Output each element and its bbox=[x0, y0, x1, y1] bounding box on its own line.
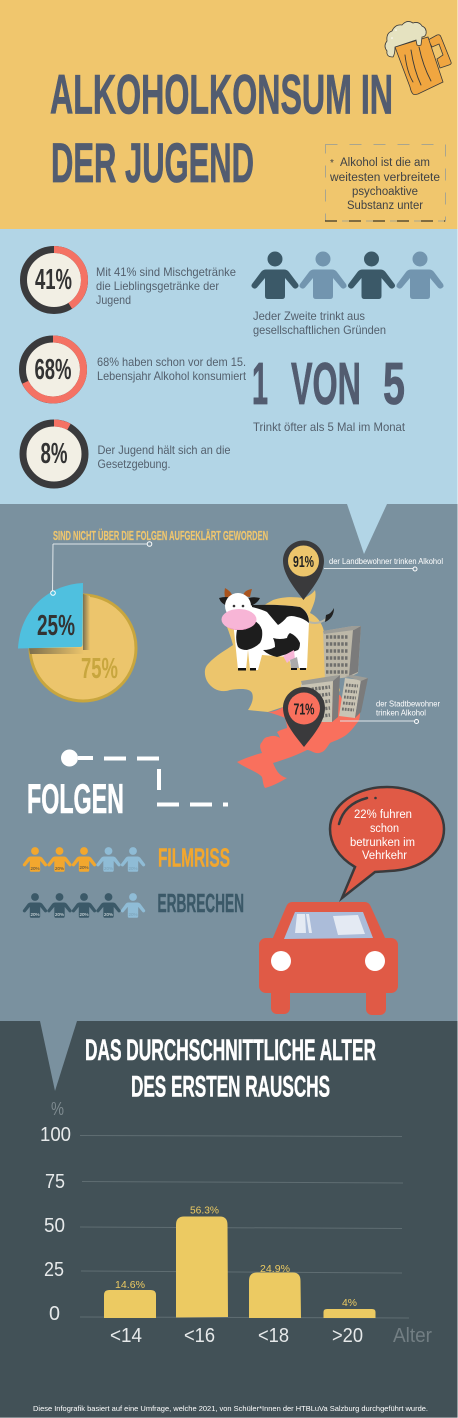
title bbox=[50, 62, 393, 194]
icon: map pin 71 percent: 71% bbox=[294, 702, 314, 718]
callout: dashed note: Substanz unter bbox=[347, 200, 423, 212]
illustration: city buildings bbox=[301, 626, 368, 722]
x axis labels: <14 bbox=[110, 1325, 142, 1347]
y axis labels: 75 bbox=[45, 1171, 65, 1193]
x axis labels: Alter bbox=[393, 1325, 432, 1347]
icon: map pin 71 percent bbox=[283, 687, 325, 747]
label: stadtbewohner: trinken Alkohol bbox=[376, 708, 426, 718]
map: urban region bbox=[237, 695, 360, 788]
big number: 1 von 5 bbox=[252, 351, 405, 417]
big number: 1 von 5: 1 bbox=[252, 351, 268, 417]
callout: speech bubble: schon bbox=[370, 823, 399, 835]
y axis labels bbox=[40, 1099, 71, 1325]
callout: speech bubble: Vehrkehr bbox=[362, 850, 407, 862]
stat: 41 percent: Mit 41% sind Mischgetränke bbox=[96, 265, 236, 279]
panel: header bbox=[0, 0, 458, 229]
illustration: cow bbox=[219, 588, 334, 670]
text: jeder zweite: Jeder Zweite trinkt aus bbox=[253, 309, 365, 323]
pictogram: filmriss: 20% bbox=[30, 866, 40, 871]
illustration: red car bbox=[259, 902, 398, 1015]
icon: four people bbox=[251, 252, 444, 299]
callout: dashed note: * bbox=[330, 158, 334, 169]
pictogram: erbrechen: 20% bbox=[128, 912, 138, 917]
text: trinkt oefter: Trinkt öfter als 5 Mal im Monat bbox=[253, 420, 406, 434]
callout: dashed note bbox=[325, 144, 446, 221]
callout: speech bubble: 22% fuhren bbox=[354, 809, 412, 821]
callout: dashed note: Alkohol ist die am bbox=[340, 157, 430, 169]
heading: nicht aufgeklaert: SIND NICHT ÜBER DIE FOLGEN AUFGEKLÄRT GEWORDEN bbox=[53, 528, 268, 543]
heading: durchschnittliches alter bbox=[85, 1034, 376, 1104]
label: stadtbewohner: der Stadtbewohner bbox=[376, 700, 440, 708]
stat: 8 percent bbox=[23, 423, 231, 485]
y axis labels: 100 bbox=[40, 1124, 71, 1146]
pictogram: erbrechen: 20% bbox=[79, 912, 89, 917]
callout: speech bubble bbox=[330, 787, 444, 898]
big number: 1 von 5: 5 bbox=[383, 351, 405, 417]
text: jeder zweite: gesellschaftlichen Gründen bbox=[253, 323, 386, 337]
bar value labels: 24.9% bbox=[260, 1263, 290, 1275]
stat: 68 percent: Lebensjahr Alkohol konsumiert bbox=[97, 369, 247, 383]
callout: speech bubble: betrunken im bbox=[350, 837, 415, 849]
pie chart: 25 and 75 percent: 25% bbox=[37, 610, 75, 642]
y axis labels: % bbox=[51, 1099, 64, 1119]
label: landbewohner: der Landbewohner trinken Alkohol bbox=[329, 557, 443, 566]
stat: 68 percent: 68% haben schon vor dem 15. bbox=[97, 355, 246, 369]
bar chart bbox=[40, 1099, 432, 1347]
footer: source note: Diese Infografik basiert auf eine Umfrage, welche 2021, von Schüler*Innen der HTBLuVa Salzburg durchgeführt wurde. bbox=[33, 1404, 428, 1413]
panel: statistics bbox=[0, 229, 458, 504]
pictogram: filmriss: 20% bbox=[104, 866, 113, 871]
icon: map pin 91 percent bbox=[283, 540, 324, 600]
label: landbewohner bbox=[324, 557, 443, 571]
text: jeder zweite bbox=[253, 309, 386, 337]
map: rural region bbox=[205, 590, 340, 712]
bar value labels: 56.3% bbox=[190, 1204, 219, 1216]
title: DER JUGEND bbox=[51, 131, 254, 194]
arrow: dashed line around heading bbox=[61, 750, 228, 804]
pictogram: filmriss bbox=[23, 847, 145, 872]
icon: map pin 91 percent: 91% bbox=[293, 554, 314, 571]
bar value labels bbox=[115, 1204, 357, 1309]
x axis labels: <18 bbox=[258, 1325, 289, 1347]
panel: education, map and consequences bbox=[0, 504, 458, 1021]
bar value labels: 14.6% bbox=[115, 1279, 145, 1291]
y axis labels: 0 bbox=[49, 1303, 60, 1325]
callout: dashed note: weitesten verbreitete bbox=[329, 172, 440, 184]
pictogram: erbrechen: 20% bbox=[30, 912, 40, 917]
panel: age of first intoxication bbox=[0, 1021, 458, 1418]
callout: dashed note: psychoaktive bbox=[352, 186, 418, 198]
stat: 41 percent bbox=[24, 250, 236, 310]
heading: folgen: FOLGEN bbox=[27, 775, 124, 822]
arrow: section pointer bbox=[347, 504, 387, 554]
label: stadtbewohner bbox=[340, 700, 440, 724]
stat: 8 percent: 8% bbox=[40, 438, 68, 470]
label: erbrechen: ERBRECHEN bbox=[158, 888, 244, 918]
bars bbox=[104, 1216, 376, 1318]
stat: 41 percent: die Lieblingsgetränke der bbox=[96, 279, 219, 293]
stat: 68 percent bbox=[22, 339, 247, 400]
pictogram: filmriss: 20% bbox=[55, 866, 64, 871]
x axis labels: <16 bbox=[184, 1325, 215, 1347]
x axis labels: >20 bbox=[332, 1325, 363, 1347]
big number: 1 von 5: VON bbox=[291, 351, 361, 417]
arrow: section pointer bbox=[40, 1021, 77, 1091]
icon: beer mug bbox=[385, 21, 451, 94]
stat: 8 percent: Der Jugend hält sich an die bbox=[98, 443, 231, 457]
x axis labels bbox=[110, 1325, 432, 1347]
pie chart: 25 and 75 percent bbox=[18, 542, 152, 701]
bar value labels: 4% bbox=[342, 1297, 357, 1309]
pictogram: filmriss: 20% bbox=[128, 866, 138, 871]
pictogram: erbrechen: 20% bbox=[55, 912, 64, 917]
label: filmriss: FILMRISS bbox=[158, 842, 230, 872]
stat: 8 percent: Gesetzgebung. bbox=[98, 457, 170, 471]
stat: 68 percent: 68% bbox=[34, 354, 72, 386]
y axis labels: 25 bbox=[44, 1259, 64, 1281]
y axis labels: 50 bbox=[44, 1215, 65, 1237]
pictogram: erbrechen bbox=[23, 893, 145, 918]
pictogram: filmriss: 20% bbox=[79, 865, 89, 870]
stat: 41 percent: 41% bbox=[35, 264, 72, 296]
pie chart: 25 and 75 percent: 75% bbox=[81, 653, 118, 685]
pictogram: erbrechen: 20% bbox=[104, 912, 113, 917]
stat: 41 percent: Jugend bbox=[96, 293, 131, 307]
